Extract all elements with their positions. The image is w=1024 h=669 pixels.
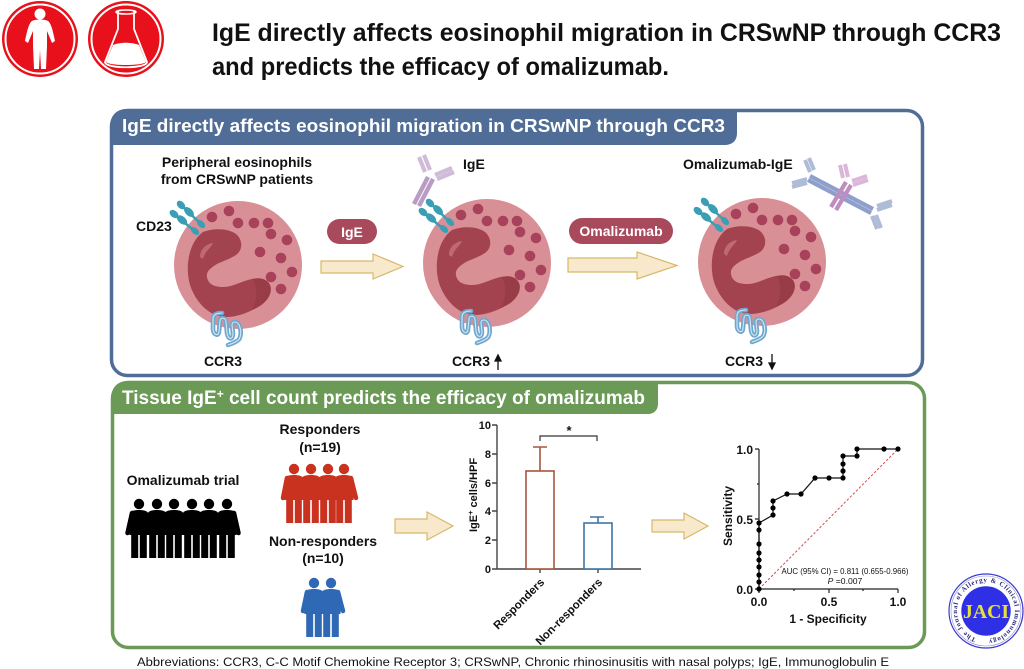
label: peripheral eosinophils: Peripheral eosinophils (162, 154, 312, 170)
label: IgE: IgE (463, 156, 485, 172)
panel: eosinophil migration (110, 109, 922, 376)
category labels: Non-responders (534, 577, 605, 648)
label: CD23: CD23 (136, 218, 172, 234)
bar: non-responders (584, 517, 612, 569)
significance bracket: * (566, 423, 572, 438)
panel heading: eosinophil migration (110, 109, 737, 145)
category labels (492, 577, 605, 648)
logo: JACI journal seal: The Journal of Allergy & Clinical Immunology (953, 578, 1020, 643)
label: Omalizumab trial: Omalizumab trial (127, 472, 239, 488)
label: Responders: (n=19) (299, 439, 341, 455)
title (212, 19, 1001, 81)
ROC curve chart: 0.5 (736, 513, 753, 527)
title: and predicts the efficacy of omalizumab. (212, 53, 669, 81)
icon: IgE antibody (414, 155, 454, 206)
label: Non-responders: Non-responders (269, 533, 377, 549)
axis title: IgE+ cells/HPF: IgE (468, 515, 480, 532)
label: Non-responders (269, 533, 377, 566)
title: IgE directly affects eosinophil migration in CRSwNP through CCR3 (212, 19, 1001, 47)
bar chart: IgE+ cells per HPF: 0 (485, 564, 491, 576)
label: Omalizumab-IgE: Omalizumab-IgE (683, 156, 793, 172)
panel heading: tissue IgE prediction (111, 381, 658, 414)
label: CCR3 baseline: CCR3 (204, 353, 242, 369)
logo: JACI journal seal: JACI (963, 601, 1009, 623)
pill: Omalizumab: Omalizumab (579, 223, 663, 239)
category labels: Responders (492, 577, 547, 632)
cell: IgE-stimulated eosinophil (417, 197, 551, 343)
label: Responders (280, 421, 361, 455)
icon: Omalizumab-IgE complex (792, 158, 892, 229)
bar chart: IgE+ cells per HPF: 10 (479, 420, 491, 432)
ROC curve chart: 1.0 (736, 443, 753, 457)
axis title: IgE+ cells/HPF: cells/HPF (468, 458, 480, 511)
pill: IgE (327, 219, 377, 244)
bar chart: IgE+ cells per HPF: 8 (485, 449, 491, 461)
label: CCR3 decreased: CCR3 (725, 353, 763, 369)
cell: omalizumab-treated eosinophil (692, 196, 826, 342)
panel: tissue IgE prediction (111, 381, 924, 648)
icon: laboratory flask (88, 1, 164, 77)
axis title: sensitivity: Sensitivity (721, 486, 735, 546)
ROC curve chart: 1.0 (890, 595, 907, 609)
people: trial group (128, 499, 238, 558)
label: CCR3 increased: CCR3 (452, 353, 490, 369)
AUC annotation (782, 566, 909, 586)
pill: Omalizumab (569, 218, 673, 244)
panel heading: eosinophil migration: IgE directly affects eosinophil migration in CRSwNP through CCR3 (122, 115, 725, 136)
cell: baseline eosinophil (168, 199, 302, 345)
label: Responders: Responders (280, 421, 361, 437)
AUC annotation: P =0.007 (828, 576, 863, 586)
arrow: groups to bar chart (395, 512, 453, 540)
AUC annotation: AUC (95% CI) = 0.811 (0.655-0.966) (782, 566, 909, 576)
bar chart: IgE+ cells per HPF: 4 (485, 506, 492, 518)
arrow: bar chart to ROC (652, 513, 708, 539)
panel heading: tissue IgE prediction: cell count predicts the efficacy of omalizumab (224, 388, 645, 409)
ROC curve chart: 0.5 (821, 595, 838, 609)
axis title: 1 - specificity: 1 - Specificity (789, 612, 867, 626)
pill: IgE: IgE (341, 224, 363, 240)
bar chart: IgE+ cells per HPF: 2 (485, 535, 491, 547)
panel heading: tissue IgE prediction: Tissue IgE (122, 388, 217, 409)
people: non-responders (303, 578, 343, 637)
ROC curve chart: 0.0 (751, 595, 768, 609)
arrow: Omalizumab treatment (568, 252, 677, 279)
bar: responders (526, 447, 554, 569)
significance bracket (540, 423, 597, 441)
ROC curve chart: 0.0 (736, 583, 753, 597)
people: responders (283, 464, 356, 523)
footer: abbreviations: Abbreviations: CCR3, C-C Motif Chemokine Receptor 3; CRSwNP, Chronic rhinosinusitis with nasal polyps; IgE, Immunoglobulin E (137, 655, 889, 669)
ROC curve chart (721, 443, 909, 626)
axis title: IgE+ cells/HPF: + (466, 510, 475, 515)
bar chart: IgE+ cells per HPF: 6 (485, 478, 491, 490)
panel heading: tissue IgE prediction: + (217, 387, 224, 401)
label: peripheral eosinophils: from CRSwNP patients (161, 171, 313, 187)
label: Non-responders: (n=10) (302, 550, 344, 566)
label: peripheral eosinophils (161, 154, 313, 187)
bar chart: IgE+ cells per HPF (466, 420, 641, 648)
arrow: IgE treatment (321, 254, 403, 279)
icon: human study (2, 1, 78, 77)
